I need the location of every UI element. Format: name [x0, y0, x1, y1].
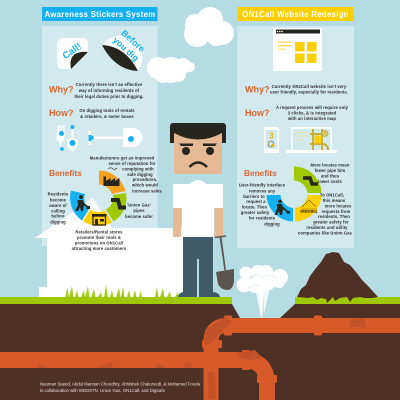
- man shirt: [173, 180, 223, 237]
- text: residents: become: [50, 198, 67, 202]
- heading: on1call: [237, 7, 354, 21]
- text: to on1call: residents and utility: [306, 225, 348, 230]
- credits: Nauman Saeed, Abdul Mannan Choudhry, Abhishek Chaturvedi, & Mohamed Fouda: [40, 382, 201, 386]
- donut chart: right benefits: [266, 166, 322, 222]
- icon: before you dig sticker: [102, 28, 147, 71]
- text: to on1call: [298, 192, 353, 236]
- text: residents: digging: [50, 220, 66, 224]
- icon: digger left: [75, 195, 90, 211]
- text: to on1call: To ON1Call,: [320, 192, 344, 198]
- text: retailers: attracting more customers: [72, 246, 127, 251]
- pipe upper: [211, 326, 400, 400]
- text: retailers: promote their tools &: [77, 235, 121, 240]
- icon: phone three clicks: 3: [269, 132, 274, 140]
- text: how left: & retailers, & meter boxes: [80, 114, 134, 119]
- icon: digger right: [274, 200, 290, 215]
- heading: why left: Why?: [49, 84, 74, 94]
- icon: before you dig sticker: you dig: [111, 35, 141, 63]
- text: more locates: and thus: [321, 174, 340, 178]
- man head: [174, 130, 222, 174]
- shovel: [215, 236, 234, 290]
- text: retailers: Retailers/Rental stores: [75, 230, 123, 234]
- cloud: middle: [147, 57, 195, 83]
- icon: pipe left: [111, 200, 126, 208]
- icon: phone three clicks: [264, 127, 279, 153]
- ground: grass strip: [0, 297, 400, 304]
- icon: website browser: [273, 28, 322, 71]
- text: user friendly: digging: [264, 222, 280, 226]
- text: residents: before: [51, 214, 65, 218]
- text: why left: way of informing residents of: [78, 88, 140, 93]
- text: user friendly: barriers to: [243, 194, 265, 199]
- text: user friendly: locate. Then: [242, 204, 268, 210]
- man shoes: [178, 292, 220, 297]
- text: user friendly: request a: [246, 199, 266, 204]
- text: more locates: [311, 162, 350, 184]
- text: residents: calling: [51, 208, 65, 214]
- text: manufacturers: procedures,: [133, 177, 157, 182]
- text: to on1call: this means: [323, 198, 346, 203]
- man frown: [190, 162, 207, 167]
- text: to on1call: more locates: [325, 204, 352, 208]
- heading: benefits left: Benefits: [49, 168, 82, 178]
- grass: [65, 285, 194, 297]
- heading: benefits right: Benefits: [244, 168, 277, 178]
- icon: laptop map: [286, 127, 337, 153]
- text: why right: [270, 84, 348, 94]
- icon: pipe right: [303, 178, 318, 184]
- text: why right: Currently ON1Call website isn't very: [272, 84, 347, 89]
- text: residents: [48, 192, 69, 224]
- heading: on1call: ON1Call Website Redesign: [242, 10, 349, 19]
- panel: on1call website redesign: [237, 7, 354, 248]
- dirt mound: [297, 252, 378, 303]
- heading: how left: How?: [49, 108, 74, 118]
- icon: call sticker: [57, 38, 88, 69]
- text: how right: A request process will require only: [276, 105, 349, 110]
- text: how right: [276, 105, 349, 121]
- text: user friendly: [239, 182, 286, 226]
- text: how left: [79, 108, 135, 119]
- heading: awareness stickers: [42, 7, 158, 21]
- icon: call sticker: Call!: [61, 41, 84, 62]
- text: manufacturers: complying with: [122, 166, 154, 172]
- text: manufacturers: [90, 156, 162, 194]
- house: [35, 198, 183, 297]
- panel background right: [237, 26, 354, 248]
- icon: store: [92, 214, 106, 225]
- man arms: [173, 208, 223, 237]
- pipe lower: [0, 360, 267, 400]
- ground: soil: [0, 304, 400, 400]
- credits: [40, 382, 201, 393]
- text: manufacturers: which would: [131, 182, 158, 188]
- heading: awareness stickers: Awareness Stickers System: [45, 10, 155, 19]
- text: how right: 3 clicks, & is integrated: [288, 110, 337, 116]
- man: [170, 123, 226, 297]
- icon: factory: [104, 168, 120, 186]
- man hair: [170, 123, 226, 143]
- donut chart: left benefits: [70, 168, 126, 226]
- panel: awareness stickers system: [42, 7, 158, 246]
- geyser: [236, 265, 288, 323]
- text: union gas: become safer: [125, 214, 153, 219]
- credits: in collaboration with WBOSTN, Union Gas, ON1Call, and DigSafe: [40, 388, 166, 393]
- pipe collars: [202, 316, 322, 383]
- icon: digging tools: [56, 125, 143, 152]
- heading: why right: Why?: [245, 84, 270, 94]
- text: user friendly: User-friendly interface: [239, 182, 286, 188]
- heading: how right: How?: [245, 108, 270, 118]
- icon: before you dig sticker: Before: [119, 28, 147, 54]
- text: user friendly: removes any: [249, 188, 276, 194]
- text: more locates: More locates mean: [311, 162, 350, 168]
- text: why left: [74, 82, 144, 99]
- man eyes: [179, 144, 217, 155]
- text: union gas: pipes: [133, 208, 145, 213]
- text: why left: their legal duties prior to digging.: [74, 94, 144, 99]
- text: user friendly: for residents: [249, 216, 276, 220]
- text: union gas: [125, 202, 153, 219]
- text: manufacturers: sense of reputation for: [108, 161, 156, 166]
- text: how left: On digging tools of rentals: [79, 108, 135, 113]
- text: residents: aware of: [49, 203, 67, 208]
- text: how right: with an interactive map: [287, 116, 336, 121]
- text: to on1call: residents. Then: [318, 214, 350, 219]
- panel background left: [42, 26, 158, 246]
- man legs: [183, 237, 213, 294]
- text: why left: Currently there isn't an effective: [76, 82, 143, 87]
- cloud: top right: [184, 7, 234, 47]
- text: user friendly: greater safety: [241, 210, 270, 215]
- icon: on1call logo: ON1CALL: [300, 209, 319, 213]
- text: manufacturers: increase sales: [132, 188, 162, 194]
- text: to on1call: companies like Union Gas: [298, 230, 353, 236]
- text: to on1call: requests from: [322, 209, 351, 214]
- text: manufacturers: safe digging: [127, 172, 153, 177]
- pipe rust patches: [38, 317, 366, 400]
- text: retailers: [72, 230, 127, 251]
- text: union gas: 'Union Gas': [127, 202, 151, 208]
- text: to on1call: greater safety for: [313, 220, 349, 224]
- pipes: [0, 316, 400, 400]
- text: more locates: lower costs: [318, 179, 343, 184]
- text: residents: Residents: [48, 192, 69, 196]
- text: manufacturers: Manufacturers get an improved: [90, 156, 155, 160]
- text: retailers: promotions on ON1Call: [75, 240, 123, 246]
- text: more locates: fewer pipe hits: [315, 168, 346, 173]
- text: why right: user friendly, especially for residents.: [270, 90, 348, 94]
